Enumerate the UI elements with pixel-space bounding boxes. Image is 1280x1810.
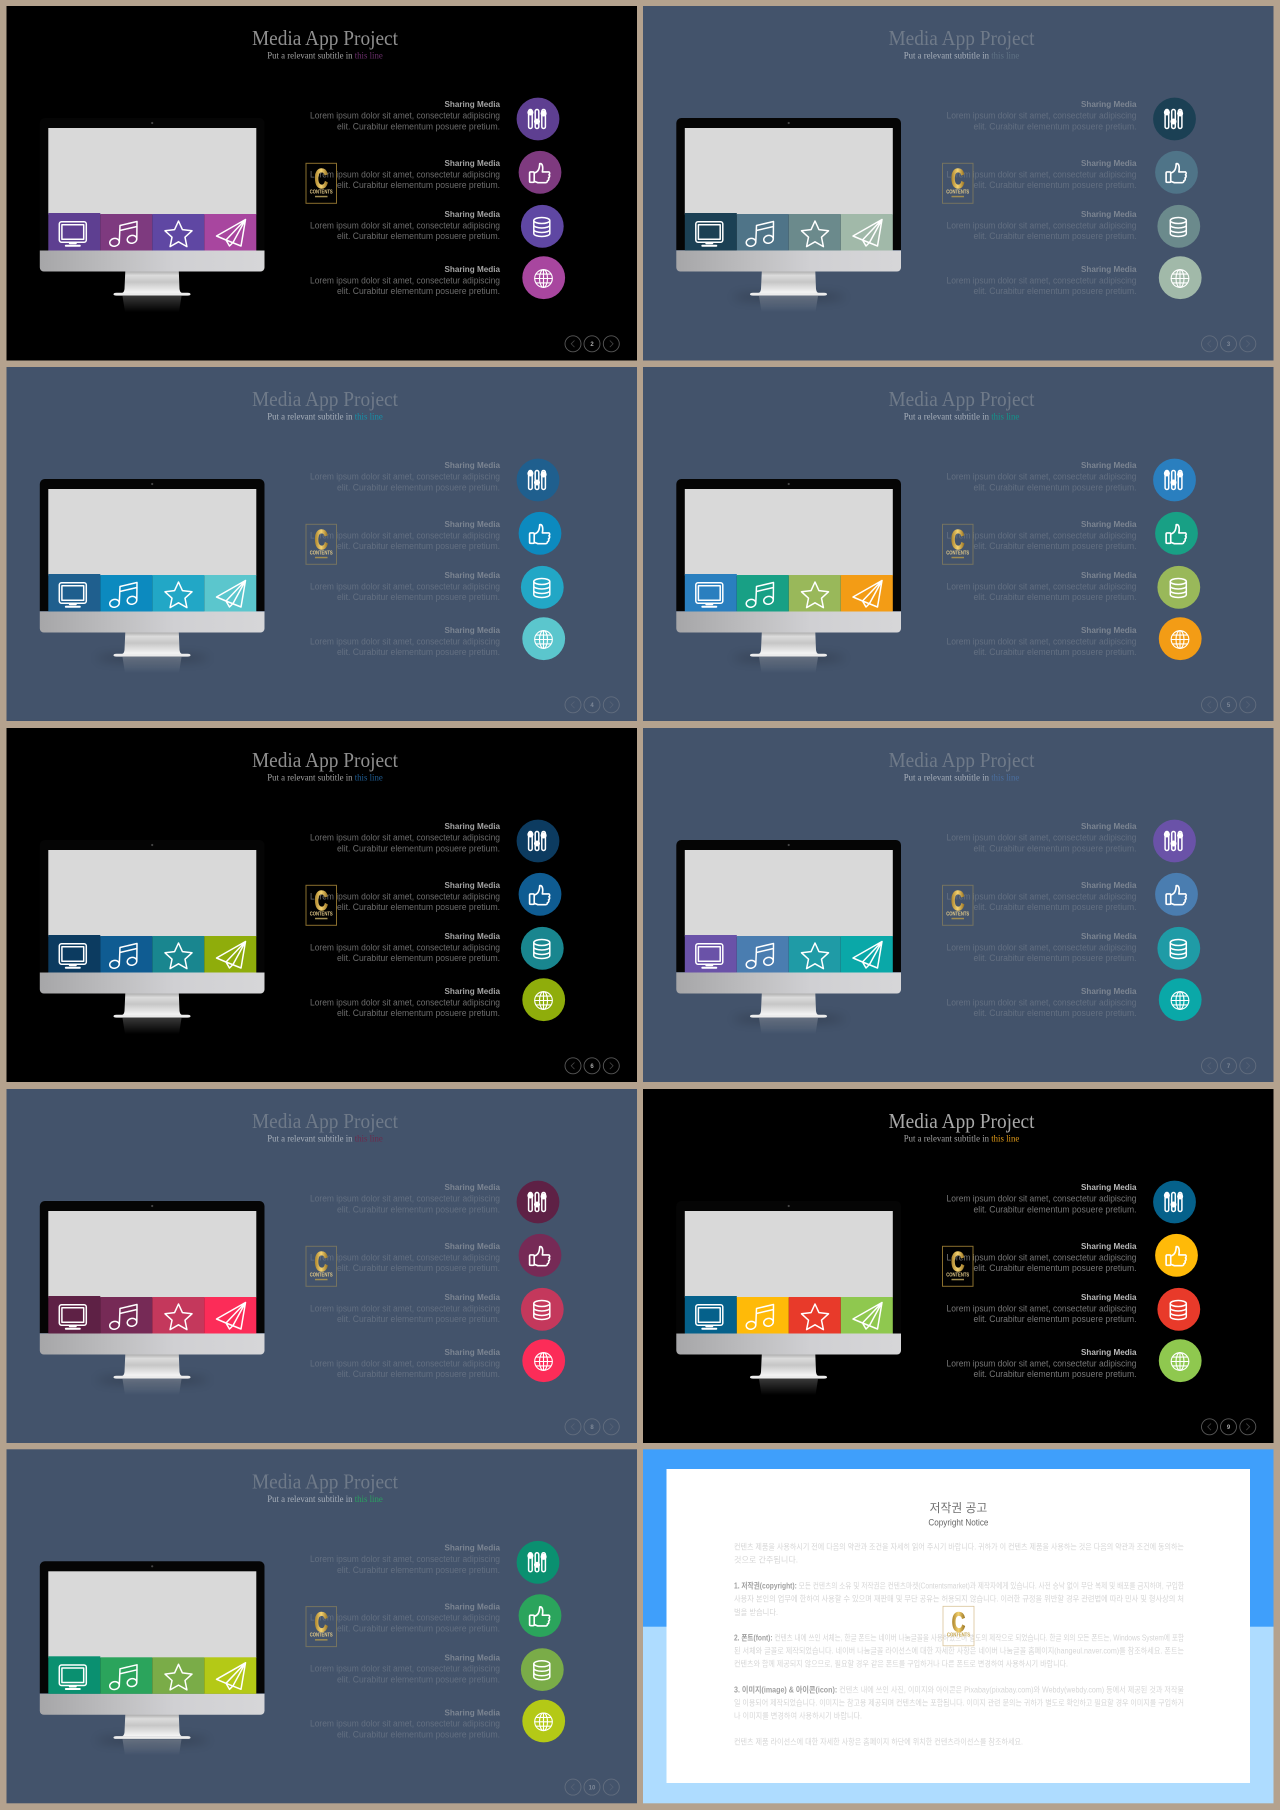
item 3: elit. Curabitur elementum posuere pretium.	[974, 1314, 1136, 1324]
pager	[565, 1779, 619, 1795]
item 2: elit. Curabitur elementum posuere pretium.	[337, 1624, 500, 1634]
notice subheading: Copyright Notice	[928, 1518, 988, 1528]
item 2: Sharing Media	[444, 1601, 500, 1611]
item 2: Sharing Media	[1081, 519, 1137, 529]
item 2: elit. Curabitur elementum posuere pretium.	[337, 180, 500, 190]
logo badge	[306, 885, 336, 925]
item 3: Lorem ipsum dolor sit amet, consectetur adipiscing	[946, 942, 1136, 952]
item 2: elit. Curabitur elementum posuere pretium.	[974, 902, 1136, 912]
item 1: elit. Curabitur elementum posuere pretium.	[974, 122, 1136, 132]
item 3: Lorem ipsum dolor sit amet, consectetur adipiscing	[310, 220, 500, 230]
panel: slide 5 (slate, multicolour)	[643, 367, 1274, 721]
item 2: Sharing Media	[444, 158, 500, 168]
item 1: Lorem ipsum dolor sit amet, consectetur adipiscing	[946, 472, 1136, 482]
item 3: Lorem ipsum dolor sit amet, consectetur adipiscing	[310, 1664, 500, 1674]
panel: slide 7 (slate, violet and teal)	[643, 728, 1274, 1082]
item 3: Lorem ipsum dolor sit amet, consectetur adipiscing	[946, 1303, 1136, 1313]
logo badge	[942, 524, 973, 564]
item 2: Sharing Media	[1081, 880, 1137, 890]
logo badge: C	[314, 1606, 328, 1637]
item 1: elit. Curabitur elementum posuere pretium.	[337, 1205, 500, 1215]
logo badge: CONTENTS	[310, 550, 333, 556]
item 1: elit. Curabitur elementum posuere pretium.	[337, 1565, 500, 1575]
notice body text: 1. 저작권(copyright): 모든 컨텐츠의 소유 및 저작권은 컨텐츠마켓(Contentsmarket)과 제작자에게 있습니다. 사전 승낙 없이 무단 복제 및 배포를 금지하며, 구입한	[734, 1581, 1184, 1591]
item 4: Lorem ipsum dolor sit amet, consectetur adipiscing	[946, 636, 1136, 646]
item 3	[310, 566, 564, 609]
item 2: Sharing Media	[444, 1241, 500, 1251]
item 1: Lorem ipsum dolor sit amet, consectetur adipiscing	[310, 472, 500, 482]
item 2: Lorem ipsum dolor sit amet, consectetur adipiscing	[946, 1252, 1136, 1262]
pager	[1202, 1058, 1256, 1074]
logo badge: C	[314, 885, 328, 916]
subtitle: Put a relevant subtitle in this line	[904, 413, 1019, 423]
item 4: elit. Curabitur elementum posuere pretium.	[337, 647, 500, 657]
item 2	[310, 873, 561, 916]
item 1: Sharing Media	[1081, 460, 1137, 470]
monitor with app tiles	[676, 118, 901, 312]
item 1: Lorem ipsum dolor sit amet, consectetur adipiscing	[946, 833, 1136, 843]
item 1: Sharing Media	[444, 1542, 500, 1552]
pager	[1202, 336, 1256, 352]
item 1: Sharing Media	[444, 460, 500, 470]
monitor with app tiles	[40, 479, 264, 673]
notice body text: 것으로 간주됩니다.	[734, 1554, 798, 1564]
panel: slide 4 (slate, blue)	[6, 367, 637, 721]
logo badge: CONTENTS	[946, 550, 970, 556]
item 4: Lorem ipsum dolor sit amet, consectetur adipiscing	[310, 1719, 500, 1729]
item 2: elit. Curabitur elementum posuere pretium.	[974, 1263, 1136, 1273]
logo badge: C	[314, 163, 328, 194]
item 2	[946, 873, 1198, 916]
item 2	[310, 1234, 561, 1277]
panel: slide 6 (black, navy and lime)	[6, 728, 637, 1082]
monitor with app tiles	[40, 118, 264, 312]
item 1	[946, 1181, 1196, 1223]
item 1	[310, 820, 559, 862]
item 2	[310, 1594, 561, 1637]
pager	[565, 697, 619, 713]
title: Media App Project	[888, 748, 1035, 772]
item 1: Lorem ipsum dolor sit amet, consectetur adipiscing	[946, 111, 1136, 121]
item 1: Sharing Media	[444, 1182, 500, 1192]
item 3: Lorem ipsum dolor sit amet, consectetur adipiscing	[310, 1303, 500, 1313]
pager: 3	[1227, 342, 1231, 348]
item 4: Lorem ipsum dolor sit amet, consectetur adipiscing	[310, 636, 500, 646]
item 4: Lorem ipsum dolor sit amet, consectetur adipiscing	[310, 997, 500, 1007]
item 3: Sharing Media	[444, 931, 500, 941]
logo badge: C	[951, 885, 964, 916]
item 2: Sharing Media	[444, 880, 500, 890]
logo badge: CONTENTS	[946, 189, 970, 195]
item 4: Sharing Media	[444, 1347, 500, 1357]
notice body text: 2. 폰트(font): 컨텐츠 내에 쓰인 서체는, 한글 폰트는 네이버 나눔글꼴을 사용하였으며 별도의 제작으로 되었습니다. 한글 외의 모든 폰트는, Windows System에 포함	[734, 1633, 1184, 1643]
item 3: elit. Curabitur elementum posuere pretium.	[974, 953, 1136, 963]
notice body text: 사용자 본인의 업무에 한하여 사용할 수 있으며 재판매 및 무단 공유는 허용되지 않습니다. 이러한 규정을 위반할 경우 관련법에 따라 민사 및 형사상의 처	[734, 1593, 1184, 1603]
pager: 7	[1227, 1064, 1231, 1070]
item 1	[310, 1541, 559, 1584]
logo badge: CONTENTS	[946, 1272, 970, 1278]
item 4: Sharing Media	[444, 625, 500, 635]
item 2: Lorem ipsum dolor sit amet, consectetur adipiscing	[310, 1613, 500, 1623]
item 2: elit. Curabitur elementum posuere pretium.	[974, 180, 1136, 190]
item 4: Sharing Media	[444, 1707, 500, 1717]
item 1: elit. Curabitur elementum posuere pretium.	[337, 844, 500, 854]
subtitle: Put a relevant subtitle in this line	[267, 774, 383, 784]
item 4: elit. Curabitur elementum posuere pretium.	[337, 1730, 500, 1740]
logo badge	[306, 1246, 336, 1286]
item 2: Lorem ipsum dolor sit amet, consectetur adipiscing	[310, 530, 500, 540]
title: Media App Project	[252, 387, 398, 411]
item 3: Lorem ipsum dolor sit amet, consectetur adipiscing	[310, 942, 500, 952]
item 3	[946, 566, 1200, 609]
item 3: Lorem ipsum dolor sit amet, consectetur adipiscing	[310, 581, 500, 591]
item 3: elit. Curabitur elementum posuere pretium.	[974, 231, 1136, 241]
title: Media App Project	[252, 748, 398, 772]
item 3	[946, 205, 1200, 248]
item 1: elit. Curabitur elementum posuere pretium.	[337, 122, 500, 132]
item 3: elit. Curabitur elementum posuere pretium.	[337, 1675, 500, 1685]
item 3	[310, 205, 564, 248]
item 4: elit. Curabitur elementum posuere pretium.	[974, 286, 1136, 296]
notice body text: 일 이용되어 제작되었습니다. 이미지는 참고용 제공되며 컨텐츠에는 포함됩니다. 이미지 관련 문의는 귀하가 별도로 확인하고 필요할 경우 이미지를 구입하거	[734, 1697, 1184, 1707]
item 1: elit. Curabitur elementum posuere pretium.	[974, 1205, 1136, 1215]
item 3: Lorem ipsum dolor sit amet, consectetur adipiscing	[946, 220, 1136, 230]
item 2: elit. Curabitur elementum posuere pretium.	[337, 541, 500, 551]
notice body text: 컨텐츠 제품 라이선스에 대한 자세한 사항은 홈페이지 하단에 위치한 컨텐츠라이선스를 참조하세요.	[734, 1737, 1023, 1747]
item 1: elit. Curabitur elementum posuere pretium.	[974, 483, 1136, 493]
item 2	[310, 151, 561, 194]
item 1: Sharing Media	[444, 99, 500, 109]
notice heading: 저작권 공고	[930, 1501, 987, 1515]
logo badge: CONTENTS	[310, 1272, 333, 1278]
logo badge: C	[314, 524, 328, 555]
monitor with app tiles	[676, 1201, 901, 1395]
item 4	[310, 256, 565, 299]
title: Media App Project	[888, 1109, 1035, 1133]
pager	[565, 1058, 619, 1074]
item 3: Sharing Media	[1081, 1292, 1137, 1302]
pager: 6	[590, 1064, 594, 1070]
item 4	[310, 617, 565, 660]
subtitle: Put a relevant subtitle in this line	[904, 774, 1019, 784]
subtitle: Put a relevant subtitle in this line	[267, 52, 383, 62]
subtitle: Put a relevant subtitle in this line	[267, 413, 383, 423]
item 2: Sharing Media	[1081, 158, 1137, 168]
logo badge: CONTENTS	[947, 1633, 971, 1639]
logo badge	[942, 1246, 973, 1286]
item 2: Sharing Media	[1081, 1241, 1137, 1251]
item 1: Lorem ipsum dolor sit amet, consectetur adipiscing	[310, 111, 500, 121]
item 1: Lorem ipsum dolor sit amet, consectetur adipiscing	[310, 1194, 500, 1204]
panel: copyright notice	[643, 1449, 1274, 1803]
item 4: elit. Curabitur elementum posuere pretium.	[974, 1369, 1136, 1379]
notice body text: 컨텐츠 제품을 사용하시기 전에 다음의 약관과 조건을 자세히 읽어 주시기 바랍니다. 귀하가 이 컨텐츠 제품을 사용하는 것은 다음의 약관과 조건에 동의하는	[734, 1542, 1184, 1552]
item 1	[946, 98, 1196, 140]
item 4	[946, 256, 1202, 299]
item 4	[310, 978, 565, 1021]
monitor with app tiles	[40, 1561, 264, 1755]
item 4: Sharing Media	[1081, 986, 1137, 996]
item 4: Lorem ipsum dolor sit amet, consectetur adipiscing	[946, 997, 1136, 1007]
item 4: Lorem ipsum dolor sit amet, consectetur adipiscing	[946, 1358, 1136, 1368]
notice body text: 벌을 받습니다.	[734, 1607, 778, 1617]
pager	[565, 336, 619, 352]
item 3: Sharing Media	[444, 209, 500, 219]
item 4: elit. Curabitur elementum posuere pretium.	[337, 1008, 500, 1018]
item 2: Lorem ipsum dolor sit amet, consectetur adipiscing	[946, 891, 1136, 901]
subtitle: Put a relevant subtitle in this line	[267, 1135, 383, 1145]
panel: slide 2 (black, purple)	[6, 6, 637, 360]
item 4: elit. Curabitur elementum posuere pretium.	[974, 647, 1136, 657]
title: Media App Project	[252, 26, 398, 50]
logo badge: C	[314, 1246, 328, 1277]
item 2	[310, 512, 561, 555]
pager: 8	[590, 1425, 594, 1431]
title: Media App Project	[252, 1109, 398, 1133]
item 4: Sharing Media	[1081, 264, 1137, 274]
item 4: Lorem ipsum dolor sit amet, consectetur adipiscing	[310, 1358, 500, 1368]
panel: slide 3 (slate, teal-grey)	[643, 6, 1274, 360]
item 3: elit. Curabitur elementum posuere pretium.	[974, 592, 1136, 602]
logo badge	[306, 1606, 336, 1647]
notice body text: 3. 이미지(image) & 아이콘(icon): 컨텐츠 내에 쓰인 사진, 이미지와 아이콘은 Pixabay(pixabay.com)와 Webdy(webdy.com) 등에서 제공된 것과 저작물	[734, 1684, 1184, 1694]
item 4: elit. Curabitur elementum posuere pretium.	[337, 286, 500, 296]
notice body text: 나 이미지를 변경하여 사용하시기 바랍니다.	[734, 1710, 862, 1720]
logo badge	[306, 163, 336, 203]
pager	[565, 1419, 619, 1435]
item 1: Lorem ipsum dolor sit amet, consectetur adipiscing	[310, 833, 500, 843]
item 2	[946, 1234, 1198, 1277]
item 1: Sharing Media	[1081, 99, 1137, 109]
notice body text: 된 서체와 글꼴로 제작되었습니다. 네이버 나눔글꼴 라이선스에 대한 자세한 사항은 네이버 나눔글꼴 홈페이지(hangeul.naver.com)를 참조하세요. 폰트는	[734, 1646, 1184, 1656]
item 4: Sharing Media	[1081, 625, 1137, 635]
item 2: elit. Curabitur elementum posuere pretium.	[974, 541, 1136, 551]
logo badge: CONTENTS	[946, 911, 970, 917]
item 1: Sharing Media	[1081, 821, 1137, 831]
item 3	[946, 1288, 1200, 1331]
item 1	[310, 459, 559, 501]
item 2: Lorem ipsum dolor sit amet, consectetur adipiscing	[310, 169, 500, 179]
logo badge	[306, 524, 336, 564]
pager: 9	[1227, 1425, 1231, 1431]
pager: 5	[1227, 703, 1231, 709]
item 3: elit. Curabitur elementum posuere pretium.	[337, 953, 500, 963]
title: Media App Project	[252, 1469, 398, 1493]
item 1	[946, 459, 1196, 501]
item 4	[946, 617, 1202, 660]
monitor with app tiles	[676, 840, 901, 1034]
item 3: Sharing Media	[1081, 209, 1137, 219]
item 1	[310, 98, 559, 140]
logo badge: C	[951, 163, 964, 194]
item 4: Sharing Media	[444, 986, 500, 996]
panel: slide 9 (black, multicolour)	[643, 1089, 1274, 1443]
item 2: elit. Curabitur elementum posuere pretium.	[337, 902, 500, 912]
item 2: Sharing Media	[444, 519, 500, 529]
item 1: Lorem ipsum dolor sit amet, consectetur adipiscing	[946, 1194, 1136, 1204]
item 3	[946, 927, 1200, 970]
item 2: Lorem ipsum dolor sit amet, consectetur adipiscing	[946, 169, 1136, 179]
monitor with app tiles	[40, 1201, 264, 1395]
item 2: elit. Curabitur elementum posuere pretium.	[337, 1263, 500, 1273]
item 1	[946, 820, 1196, 862]
item 3: Sharing Media	[444, 1652, 500, 1662]
panel: slide 10 (slate, green)	[6, 1449, 637, 1803]
item 2: Lorem ipsum dolor sit amet, consectetur adipiscing	[310, 891, 500, 901]
logo badge: C	[951, 1246, 964, 1277]
item 1: Sharing Media	[444, 821, 500, 831]
item 1: elit. Curabitur elementum posuere pretium.	[974, 844, 1136, 854]
item 4: Lorem ipsum dolor sit amet, consectetur adipiscing	[310, 275, 500, 285]
item 2	[946, 151, 1198, 194]
logo badge	[942, 163, 973, 203]
item 3: Sharing Media	[1081, 570, 1137, 580]
item 2: Lorem ipsum dolor sit amet, consectetur adipiscing	[946, 530, 1136, 540]
item 2: Lorem ipsum dolor sit amet, consectetur adipiscing	[310, 1252, 500, 1262]
item 1: Lorem ipsum dolor sit amet, consectetur adipiscing	[310, 1554, 500, 1564]
item 4: elit. Curabitur elementum posuere pretium.	[337, 1369, 500, 1379]
item 1: elit. Curabitur elementum posuere pretium.	[337, 483, 500, 493]
pager: 10	[589, 1785, 596, 1791]
item 3	[310, 927, 564, 970]
item 3: elit. Curabitur elementum posuere pretium.	[337, 592, 500, 602]
item 4	[310, 1339, 565, 1382]
title: Media App Project	[888, 26, 1035, 50]
subtitle: Put a relevant subtitle in this line	[904, 52, 1019, 62]
subtitle: Put a relevant subtitle in this line	[267, 1495, 383, 1505]
item 3: Sharing Media	[1081, 931, 1137, 941]
pager	[1202, 1419, 1256, 1435]
item 3: elit. Curabitur elementum posuere pretium.	[337, 231, 500, 241]
item 3: elit. Curabitur elementum posuere pretium.	[337, 1314, 500, 1324]
item 2	[946, 512, 1198, 555]
title: Media App Project	[888, 387, 1035, 411]
logo badge	[942, 885, 973, 925]
pager	[1202, 697, 1256, 713]
item 3: Sharing Media	[444, 570, 500, 580]
logo badge: C	[951, 524, 964, 555]
pager: 2	[590, 342, 594, 348]
logo badge: C	[952, 1606, 965, 1637]
monitor with app tiles	[40, 840, 264, 1034]
item 4	[310, 1700, 565, 1742]
logo badge: CONTENTS	[310, 1633, 333, 1639]
notice body text	[734, 1542, 1184, 1747]
item 3: Lorem ipsum dolor sit amet, consectetur adipiscing	[946, 581, 1136, 591]
item 3	[310, 1288, 564, 1331]
subtitle: Put a relevant subtitle in this line	[904, 1135, 1019, 1145]
item 1	[310, 1181, 559, 1223]
item 4: Sharing Media	[444, 264, 500, 274]
item 4	[946, 978, 1202, 1021]
logo badge: CONTENTS	[310, 911, 333, 917]
item 4	[946, 1339, 1202, 1382]
logo badge	[943, 1606, 974, 1646]
pager: 4	[590, 703, 594, 709]
item 3	[310, 1648, 564, 1691]
monitor with app tiles	[676, 479, 901, 673]
item 4: Sharing Media	[1081, 1347, 1137, 1357]
panel: slide 8 (slate, crimson)	[6, 1089, 637, 1443]
item 4: Lorem ipsum dolor sit amet, consectetur adipiscing	[946, 275, 1136, 285]
item 1: Sharing Media	[1081, 1182, 1137, 1192]
item 4: elit. Curabitur elementum posuere pretium.	[974, 1008, 1136, 1018]
notice body text: 컨텐츠와 함께 제공되지 않으므로, 필요할 경우 같은 폰트를 구입하거나 다른 폰트로 변경하여 사용하시기 바랍니다.	[734, 1658, 1068, 1668]
item 3: Sharing Media	[444, 1292, 500, 1302]
logo badge: CONTENTS	[310, 189, 333, 195]
